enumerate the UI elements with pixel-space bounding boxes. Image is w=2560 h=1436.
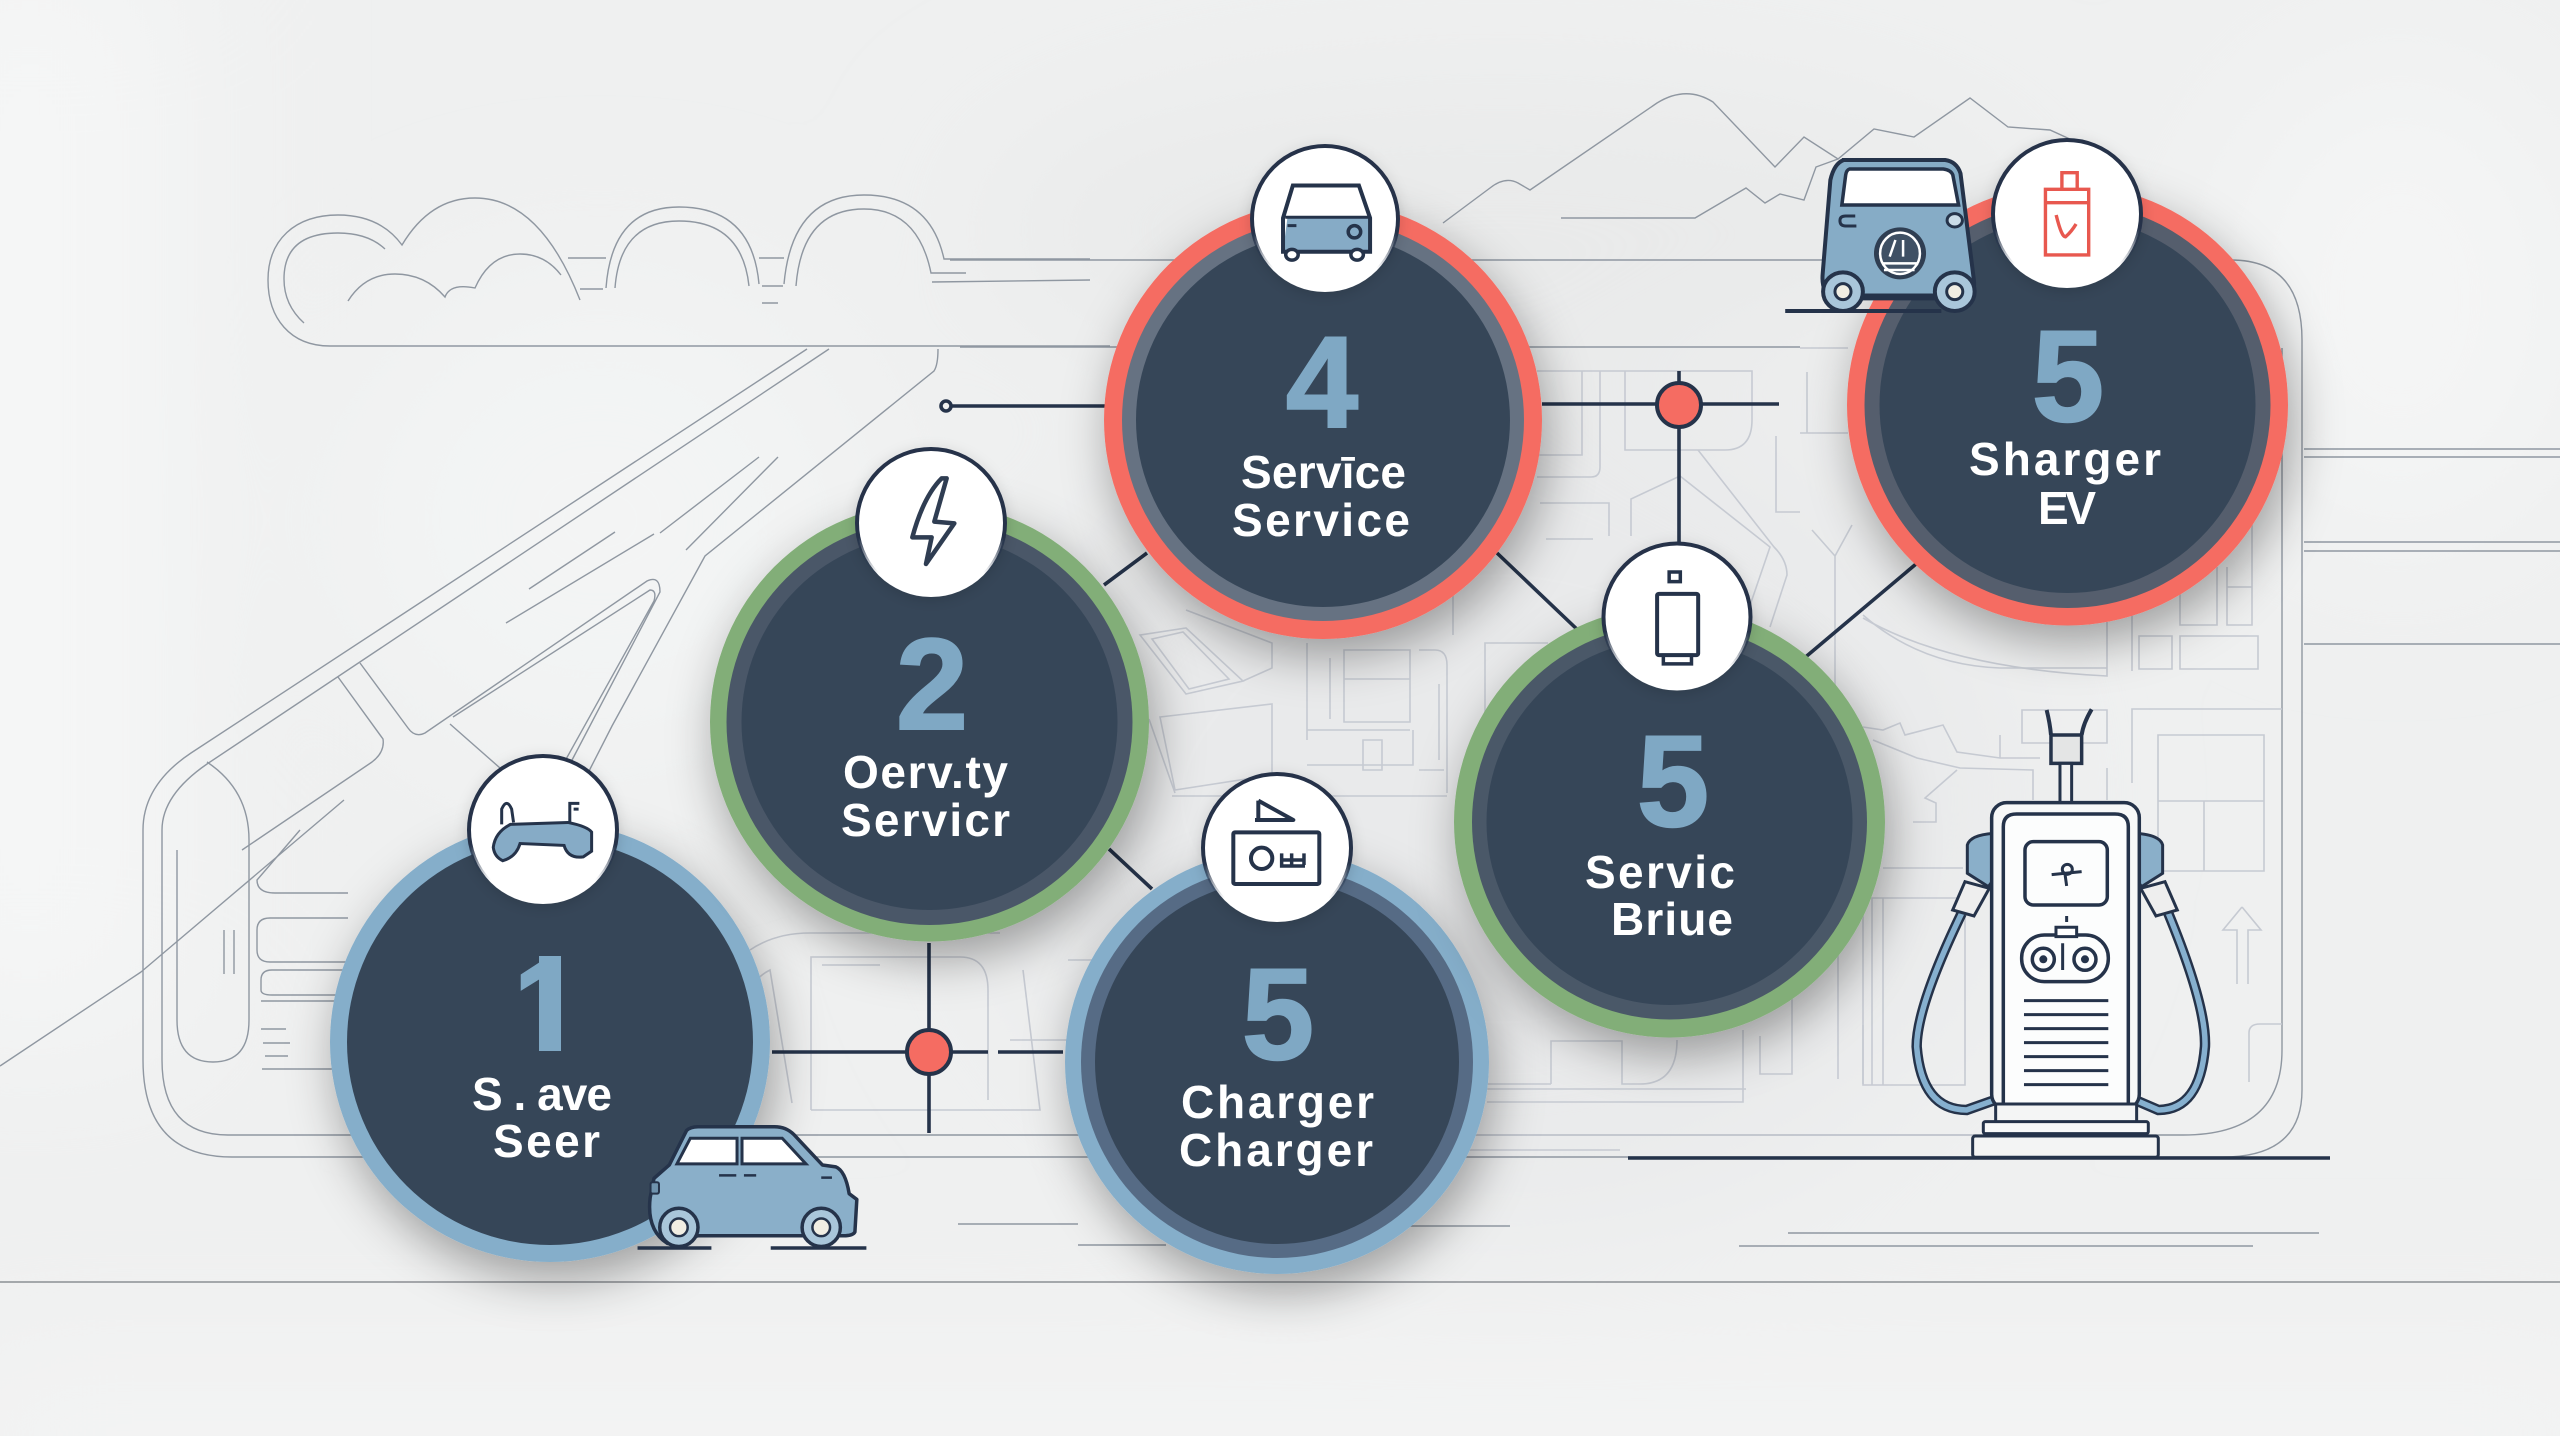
step circle 5 charger: [1065, 774, 1489, 1274]
plug mast: [2047, 709, 2092, 803]
number 5: 5: [1637, 708, 1709, 854]
badge 5 charger: [1203, 774, 1351, 922]
label 5 service: Briue: [1611, 893, 1733, 945]
step circle 4: [1104, 146, 1542, 639]
number 5: 5: [1242, 941, 1314, 1087]
step circle 5 sharger: [1847, 140, 2288, 626]
label 5 charger: Charger: [1181, 1076, 1374, 1128]
step circle 2: [710, 449, 1149, 942]
left cable and handle: [1917, 833, 1995, 1110]
label 5 sharger: Sharger: [1969, 433, 2161, 485]
label 2: Servicr: [841, 794, 1010, 846]
connector lines: [772, 371, 1916, 1133]
step circle 5 service: [1454, 544, 1885, 1038]
illustration: charging station: [1917, 709, 2205, 1157]
label 1: S . ave: [472, 1068, 612, 1120]
illustration: blue bus: [1785, 160, 1975, 311]
label 5 sharger: EV: [2038, 482, 2096, 534]
charger body: [1992, 803, 2139, 1109]
badge 2: [857, 449, 1005, 597]
map frame: [0, 260, 2560, 1282]
label 5 charger: [1179, 1076, 1374, 1176]
icon: charging unit: [1233, 801, 1319, 884]
illustration: blue car: [638, 1127, 866, 1248]
icon: van front: [1283, 185, 1370, 260]
connector network: [772, 371, 2330, 1158]
label 1: Seer: [493, 1115, 600, 1167]
icon: red bottle: [2045, 173, 2089, 255]
label 4: Service: [1232, 494, 1410, 546]
vent lines: [2024, 1001, 2108, 1085]
socket: [2022, 916, 2108, 982]
icon: battery: [1657, 572, 1698, 664]
junction dot lower: [907, 1030, 951, 1074]
hills and arches: [268, 195, 1110, 346]
number 4: 4: [1286, 309, 1358, 455]
badge 1: [469, 756, 617, 904]
label 1: [472, 1068, 612, 1167]
number 2: 2: [896, 611, 968, 757]
screen: [2025, 842, 2107, 905]
label 5 sharger: [1969, 433, 2161, 534]
junction dot upper: [1657, 383, 1701, 427]
number 5: 5: [2032, 303, 2104, 449]
badge 5 service: [1604, 544, 1750, 690]
number 1: 1: [513, 932, 585, 1078]
label 5 service: Servic: [1585, 846, 1735, 898]
label 4: Servīce: [1241, 446, 1406, 498]
ground line: [1628, 1156, 2330, 1160]
label 2: [841, 746, 1010, 846]
label 5 charger: Charger: [1179, 1124, 1373, 1176]
base: [1973, 1104, 2158, 1157]
street blocks: [750, 348, 2282, 1150]
label 4: [1232, 446, 1410, 546]
mountains: [1443, 94, 2072, 223]
icon: lightning bolt: [912, 478, 954, 564]
number 1: [495, 932, 605, 1078]
icon: odd car with posts: [493, 803, 592, 861]
badge 5 sharger: [1993, 140, 2141, 288]
right cable and handle: [2135, 833, 2205, 1110]
label 2: Oerv.ty: [843, 746, 1008, 798]
step circle 1: [330, 756, 770, 1262]
badge 4: [1252, 146, 1398, 292]
label 5 service: [1585, 846, 1735, 945]
